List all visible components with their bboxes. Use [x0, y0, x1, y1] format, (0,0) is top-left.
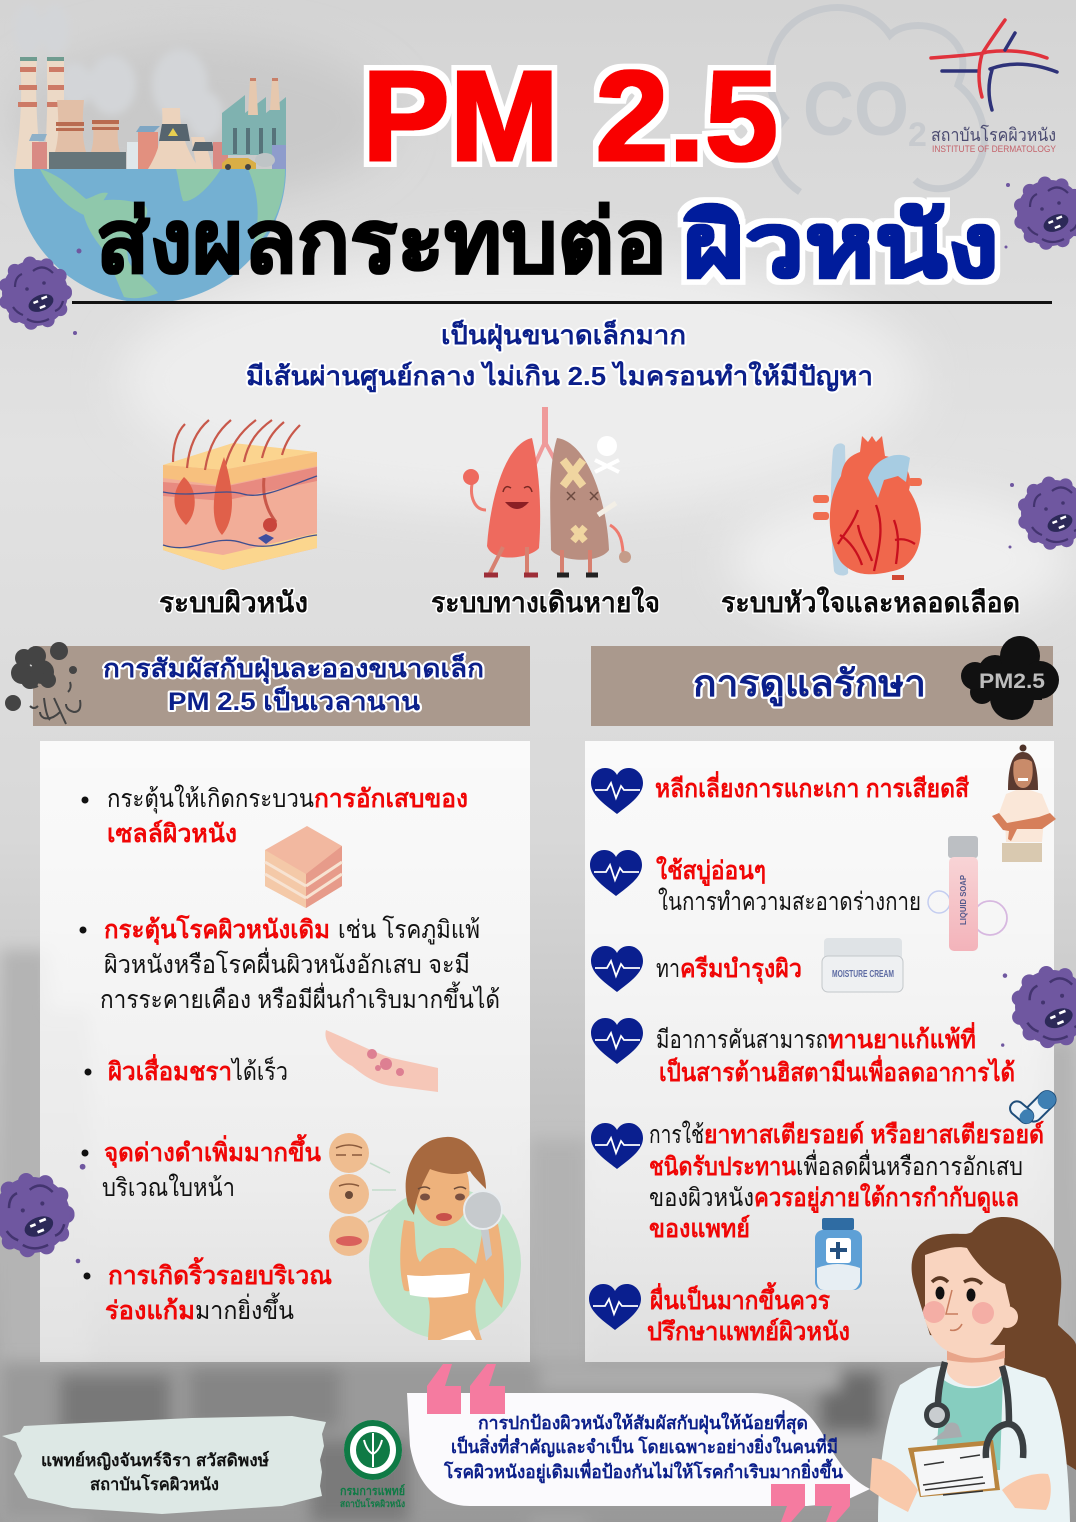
item: avoid scratching: หลีกเลี่ยงการแกะเกา การเสียดสี [655, 771, 970, 803]
item: steroid: ชนิดรับประทาน [649, 1153, 796, 1181]
item: steroid [591, 1120, 1044, 1243]
item: steroid: ยาทาสเตียรอยด์ หรือยาสเตียรอยด์ [704, 1120, 1044, 1149]
illustration: skin layers [163, 420, 317, 570]
bullet: wrinkles: มากยิ่งขึ้น [195, 1292, 294, 1325]
panel header: exposure: การสัมผัสกับฝุ่นละอองขนาดเล็ก [103, 653, 484, 685]
item: steroid: ควรอยู่ภายใต้การกำกับดูแล [754, 1182, 1019, 1214]
item: moisturizer: ทา [656, 955, 680, 983]
bullet: premature aging: ผิวเสื่อมชรา [108, 1054, 232, 1086]
bullet: existing skin disease: เช่น โรคภูมิแพ้ [338, 915, 480, 945]
item: steroid: เพื่อลดผื่นหรือการอักเสบ [796, 1149, 1023, 1181]
bullet: existing skin disease: กระตุ้นโรคผิวหนังเดิม [104, 914, 330, 946]
bullet: premature aging [84, 1054, 288, 1086]
illustration: globe with factories [14, 4, 286, 303]
illustration: co2 cloud [769, 8, 984, 192]
illustration: scratching woman [992, 744, 1056, 862]
speech bubble: เป็นสิ่งที่สำคัญและจำเป็น โดยเฉพาะอย่างยิ่งในคนที่มี [451, 1434, 838, 1458]
item: antihistamine [591, 1018, 1015, 1087]
bullet: existing skin disease: ผิวหนังหรือโรคผื่นผิวหนังอักเสบ จะมี [104, 947, 470, 979]
illustration: lungs [463, 407, 631, 576]
speech bubble [407, 1393, 870, 1506]
icon: medicine bottle [815, 1218, 862, 1290]
bullet: dark spots [82, 1133, 321, 1202]
speech bubble: การปกป้องผิวหนังให้สัมผัสกับฝุ่นให้น้อยที่สุด [478, 1410, 808, 1435]
item: steroid: การใช้ [649, 1120, 704, 1149]
illustration: heart [813, 436, 922, 580]
bullet: wrinkles: ร่องแก้ม [105, 1297, 195, 1325]
icon: rash hand [325, 1030, 438, 1092]
logo: department of medical services: กรมการแพทย์ [340, 1484, 405, 1498]
icon: dust cloud [5, 642, 80, 724]
logo: institute of dermatology: สถาบันโรคผิวหนัง [931, 124, 1056, 145]
bullet: dark spots: บริเวณใบหน้า [102, 1173, 235, 1202]
logo: institute of dermatology: INSTITUTE OF DERMATOLOGY [932, 144, 1057, 155]
illustration: co2 cloud: 2 [908, 116, 927, 154]
title: ส่งผลกระทบต่อ [96, 192, 667, 291]
icon: virus top left [0, 248, 82, 335]
bullet: inflammation: กระตุ้นให้เกิดกระบวน [107, 784, 314, 814]
footer author: สถาบันโรคผิวหนัง [90, 1474, 219, 1494]
bullet: wrinkles [84, 1256, 332, 1325]
item: avoid scratching [591, 768, 970, 814]
smoke [14, 4, 223, 139]
title: PM 2.5 [362, 45, 778, 188]
illustration: cleanser bottle: LIQUID SOAP [959, 874, 968, 925]
illustration: co2 cloud: CO [803, 67, 909, 152]
item: moisturizer: ครีมบำรุงผิว [680, 955, 802, 985]
footer author: แพทย์หญิงจันทร์จิรา สวัสดิพงษ์ [41, 1450, 269, 1471]
item: mild soap: ในการทำความสะอาดร่างกาย [658, 887, 921, 916]
icon: closing quote [771, 1484, 850, 1522]
bullet: wrinkles: การเกิดริ้วรอยบริเวณ [108, 1256, 332, 1290]
item: moisturizer [591, 946, 802, 992]
icon: virus left [0, 1164, 85, 1263]
label: respiratory system: ระบบทางเดินหายใจ [431, 586, 660, 618]
speech bubble: โรคผิวหนังอยู่เดิมเพื่อป้องกันไม่ให้โรคกำเริบมากยิ่งขึ้น [443, 1458, 844, 1484]
icon: virus middle right [1008, 468, 1076, 555]
bullet: existing skin disease [80, 914, 500, 1014]
item: mild soap: ใช้สบู่อ่อนๆ [656, 855, 766, 887]
subtitle: เป็นฝุ่นขนาดเล็กมาก [441, 319, 686, 352]
logo: institute of dermatology [931, 20, 1057, 155]
item: steroid: ของผิวหนัง [649, 1184, 754, 1212]
icon: virus top right [1004, 168, 1076, 255]
item: mild soap [590, 850, 921, 916]
label: skin system: ระบบผิวหนัง [159, 587, 308, 618]
panel header: exposure: PM 2.5 เป็นเวลานาน [168, 686, 420, 716]
title: ผิวหนัง [683, 196, 999, 295]
icon: opening quote [427, 1364, 505, 1414]
item: see a dermatologist [589, 1281, 850, 1346]
item: see a dermatologist: ปรึกษาแพทย์ผิวหนัง [647, 1317, 850, 1346]
illustration: moisture cream [822, 938, 903, 992]
panel header: treatment: การดูแลรักษา [693, 663, 926, 707]
subtitle [246, 319, 873, 393]
item: antihistamine: มีอาการคันสามารถ [656, 1026, 828, 1054]
icon: pills [1007, 1088, 1059, 1126]
item: see a dermatologist: ผื่นเป็นมากขึ้นควร [650, 1281, 831, 1315]
illustration: moisture cream: MOISTURE CREAM [832, 969, 894, 980]
item: antihistamine: เป็นสารต้านฮิสตามีนเพื่อลดอาการได้ [659, 1055, 1015, 1087]
icon: PM2.5 cloud: PM2.5 [979, 670, 1045, 693]
bullet: existing skin disease: การระคายเคือง หรือมีผื่นกำเริบมากขึ้นได้ [100, 981, 500, 1014]
panel header: exposure [33, 646, 530, 726]
illustration: doctor [870, 1217, 1076, 1522]
item: antihistamine: ทานยาแก้แพ้ที่ [828, 1022, 976, 1054]
panel: care [585, 741, 1059, 1362]
panel header: treatment [591, 646, 1053, 726]
icon: PM2.5 cloud [961, 636, 1059, 720]
icon: skin cube [265, 826, 342, 908]
bullet: inflammation: เซลล์ผิวหนัง [107, 819, 237, 848]
logo: department of medical services [340, 1420, 405, 1510]
bullet: inflammation: การอักเสบของ [314, 785, 468, 813]
panel: effects [40, 741, 530, 1362]
title [96, 45, 999, 295]
label: cardiovascular system: ระบบหัวใจและหลอดเลือด [721, 586, 1020, 618]
bullet: dark spots: จุดด่างดำเพิ่มมากขึ้น [104, 1133, 321, 1169]
bullet: premature aging: ได้เร็ว [230, 1056, 288, 1086]
illustration: cleanser bottle [928, 836, 1007, 951]
item: steroid: ของแพทย์ [649, 1214, 750, 1243]
bullet: inflammation [82, 784, 468, 848]
footer author [2, 1416, 326, 1514]
icon: virus right [1001, 957, 1076, 1054]
illustration: woman with mirror [329, 1133, 521, 1340]
logo: department of medical services: สถาบันโรคผิวหนัง [340, 1498, 405, 1510]
subtitle: มีเส้นผ่านศูนย์กลาง ไม่เกิน 2.5 ไมครอนทำให้มีปัญหา [246, 360, 873, 393]
